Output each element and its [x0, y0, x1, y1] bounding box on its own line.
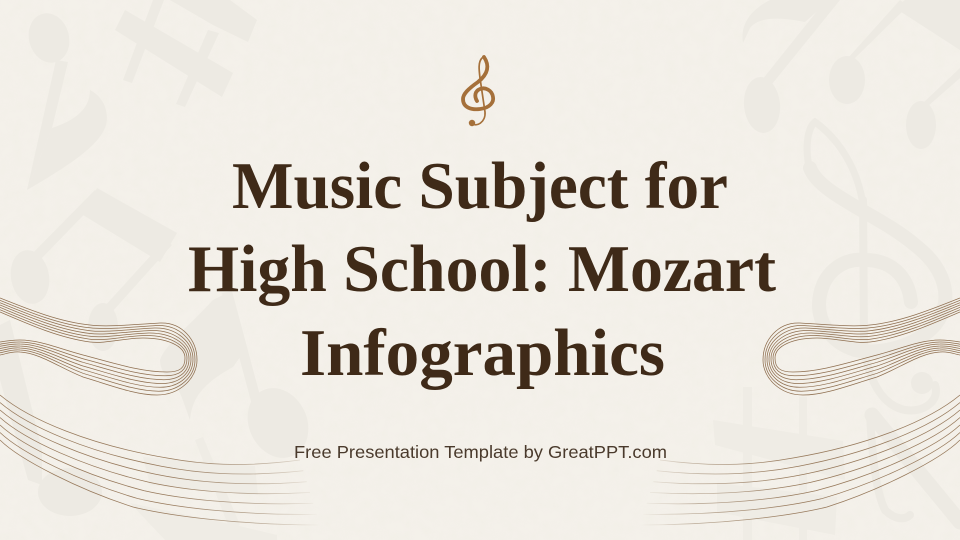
staff loop left: [0, 298, 197, 395]
note: beamed top left: [115, 0, 257, 107]
title: Infographics: [300, 316, 665, 390]
subtitle: Free Presentation Template by GreatPPT.com: [294, 442, 667, 462]
staff ribbons: left: [0, 298, 320, 525]
note: eighth top left: [23, 9, 107, 190]
staff loop right: [763, 298, 960, 395]
note: eighth top right: [742, 0, 840, 134]
faded music notes: left: [0, 0, 319, 540]
note: treble clef right: [807, 122, 960, 522]
staff ribbons: right: [640, 298, 960, 525]
title: [188, 149, 777, 390]
note: beamed top right: [829, 0, 960, 149]
faded music notes: right: [713, 0, 960, 540]
note: eighth bottom left: [0, 320, 102, 516]
note: beamed bottom: [130, 437, 277, 540]
staff swoop right: [640, 395, 960, 525]
note: beamed mid left: [7, 188, 177, 351]
note: sharp bottom right: [713, 387, 845, 540]
title: High School: Mozart: [188, 232, 777, 306]
staff swoop left: [0, 395, 320, 525]
note: eighth centre left: [160, 291, 319, 468]
icon: treble clef: [463, 57, 493, 126]
title: Music Subject for: [232, 149, 728, 223]
